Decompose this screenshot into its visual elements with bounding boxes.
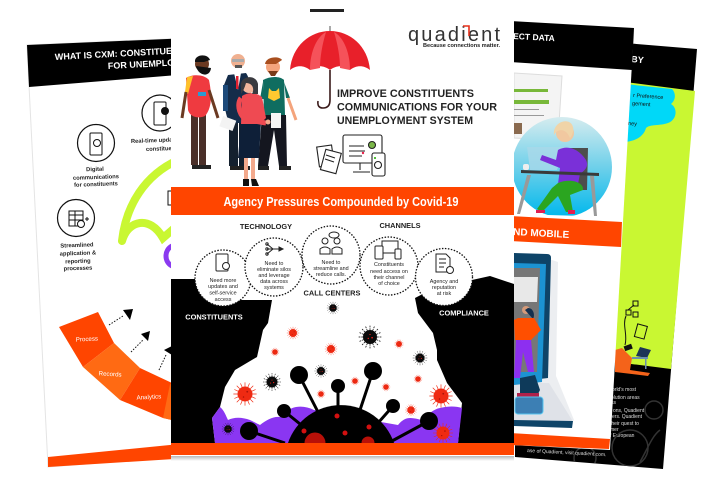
icon: document and seal: [436, 254, 454, 274]
label: real-time: constituents: [146, 146, 181, 153]
preference text: r Preference: [633, 93, 663, 101]
wheel: process: [59, 312, 114, 367]
lime panel: [600, 82, 695, 369]
logo: quadient: quadient: [408, 24, 500, 46]
labels: pressure categories: CALL CENTERS: [304, 288, 361, 298]
preference text: ney: [628, 121, 637, 128]
icon: small device: [168, 191, 174, 205]
icon: red umbrella: [290, 26, 370, 108]
circle: compliance: [416, 248, 472, 306]
illustration: group of people: [182, 54, 296, 186]
icon: phone touch: [216, 254, 230, 271]
orange footer: [171, 443, 514, 455]
label: digital communications: for constituents: [74, 181, 118, 189]
heading: improve constituents: UNEMPLOYMENT SYSTEM: [337, 115, 473, 127]
arrow 2: [131, 331, 150, 352]
text: channel of choice: need access on: [370, 269, 408, 275]
orange footer: [510, 433, 610, 449]
icon: real-time updates: [142, 95, 178, 131]
label: streamlined: Streamlined: [60, 242, 94, 250]
text: eliminate silos: Need to: [265, 261, 283, 267]
label: streamlined: application &: [60, 250, 96, 258]
text: about quadient: their quest to: [610, 421, 639, 427]
text: channel of choice: [370, 262, 408, 287]
illustration: person at desk: [512, 117, 620, 222]
sliver of back page: [310, 9, 344, 12]
label: digital communications: [73, 167, 119, 189]
logo: quadient: Because connections matter.: [423, 43, 501, 49]
circle: technology: [245, 238, 303, 296]
heading: improve constituents: [337, 88, 497, 127]
text: channel of choice: of choice: [378, 281, 400, 287]
text: streamline: reduce calls.: [316, 272, 346, 278]
text: eliminate silos: [257, 261, 291, 291]
label: streamlined: processes: [64, 266, 92, 272]
label: real-time: Real-time updates: [131, 137, 181, 145]
icon: devices: [375, 241, 401, 259]
text: about quadient: ers. Quadient: [612, 414, 643, 420]
arrow 3: [159, 346, 172, 370]
icon: digital communications: [78, 124, 114, 162]
wheel: next segment: [163, 384, 180, 422]
text: streamline: Need to: [322, 260, 340, 266]
label: real-time: [131, 137, 181, 153]
small viruses: [222, 302, 453, 443]
illustration: devices and documents: [317, 135, 385, 176]
text: agency and reputation: at risk: [437, 291, 451, 297]
illustration: person with laptop: [615, 344, 651, 376]
arrow 1: [109, 309, 133, 325]
big virus: [240, 362, 438, 443]
heading: what is cxm: WHAT IS CXM: CONSTITUENT: [55, 45, 185, 62]
text: about quadient: orld's most: [612, 387, 637, 393]
text: eliminate silos: data across: [260, 279, 288, 285]
text: need more updates: updates and: [208, 284, 238, 290]
text: need more updates: Need more: [210, 278, 236, 284]
heading second line: FOR UNEMPLOYMENT: [108, 56, 206, 71]
preference text: gement: [632, 101, 651, 108]
icon: data merge: [266, 243, 283, 255]
icon: flowchart and notes: [625, 301, 647, 345]
text: agency and reputation: reputation: [432, 285, 456, 291]
text: eliminate silos: eliminate silos: [257, 267, 291, 273]
text: eliminate silos: systems: [264, 285, 284, 291]
purple arc: [166, 246, 172, 266]
heading: and mobile: ND MOBILE: [513, 227, 570, 241]
panel: middle right page: [510, 21, 634, 450]
person: man in green sweater: [258, 57, 296, 170]
panel: left page: [27, 38, 206, 467]
wheel labels: Process: [76, 335, 98, 344]
text: streamline: [313, 260, 349, 278]
orange band: [510, 216, 622, 247]
orange banner: [171, 187, 514, 215]
cyan preference blob: [625, 84, 676, 142]
heading: improve constituents: IMPROVE CONSTITUENTS: [337, 88, 474, 100]
circle: channels: [360, 237, 418, 295]
text: need more updates: access: [215, 297, 232, 303]
black header: [27, 38, 190, 87]
wheel labels: Records: [98, 370, 122, 379]
labels: pressure categories: CHANNELS: [379, 221, 421, 230]
shadow under main page: [171, 455, 514, 461]
preference text: [628, 93, 663, 128]
text: need more updates: [208, 278, 238, 303]
text: agency and reputation: [430, 279, 458, 297]
label: streamlined: [60, 242, 96, 272]
text: channel of choice: their channel: [374, 275, 404, 281]
panel: main page: [171, 12, 514, 456]
circle: constituents need: [195, 250, 251, 306]
text: about quadient: [610, 387, 645, 439]
footer line: ase of Quadient, visit quadient.com.: [527, 448, 607, 458]
lime umbrella: [122, 160, 178, 241]
monitor: [343, 135, 382, 172]
labels: pressure categories: COMPLIANCE: [439, 308, 489, 318]
label: digital communications: Digital: [86, 167, 104, 173]
text: about quadient: f European: [610, 433, 635, 439]
labels: pressure categories: TECHNOLOGY: [240, 222, 292, 231]
black header: [510, 21, 634, 70]
icon: streamlined processes: [58, 200, 94, 236]
circle: call centers: [302, 226, 360, 284]
text: about quadient: olution areas: [611, 395, 640, 401]
decorative circles: [574, 401, 663, 469]
text: agency and reputation: Agency and: [430, 279, 458, 285]
person: man in navy suit: [219, 54, 251, 170]
black mountain background: [171, 276, 514, 443]
text: eliminate silos: and leverage: [258, 273, 290, 279]
label: digital communications: communications: [73, 174, 119, 182]
wheel labels: Analytics: [136, 393, 161, 402]
text: need more updates: self-service: [209, 290, 237, 296]
text: about quadient: mer: [610, 427, 619, 433]
label: streamlined: reporting: [65, 259, 91, 265]
banner title: Agency Pressures Compounded by Covid-19: [224, 194, 458, 209]
text: channel of choice: Constituents: [374, 262, 404, 268]
wheel labels: [76, 335, 161, 402]
text: about quadient: ons, Quadient: [613, 408, 645, 414]
orange footer: [48, 443, 190, 467]
person: man in red shirt: [182, 55, 218, 169]
heading: improve constituents: COMMUNICATIONS FOR YOUR: [337, 102, 497, 114]
screenshot of form: [514, 73, 562, 140]
text: streamline: streamline and: [313, 266, 349, 272]
illustration: giant tablet and woman: [514, 253, 574, 428]
documents: [317, 145, 341, 174]
labels: pressure categories: CONSTITUENTS: [185, 312, 243, 322]
text: about quadient: ss: [611, 400, 616, 406]
far page heading: BY: [631, 54, 644, 65]
phone: [372, 153, 385, 176]
person: woman in red top: [238, 77, 270, 186]
wheel: analytics: [120, 368, 172, 420]
panel: far right page: [515, 43, 697, 469]
icon: agents and speech: [320, 232, 342, 254]
wheel: records: [83, 343, 140, 400]
labels: pressure categories: [185, 221, 489, 322]
purple hills: [212, 406, 462, 443]
heading: collect data: ECT DATA: [513, 31, 555, 43]
